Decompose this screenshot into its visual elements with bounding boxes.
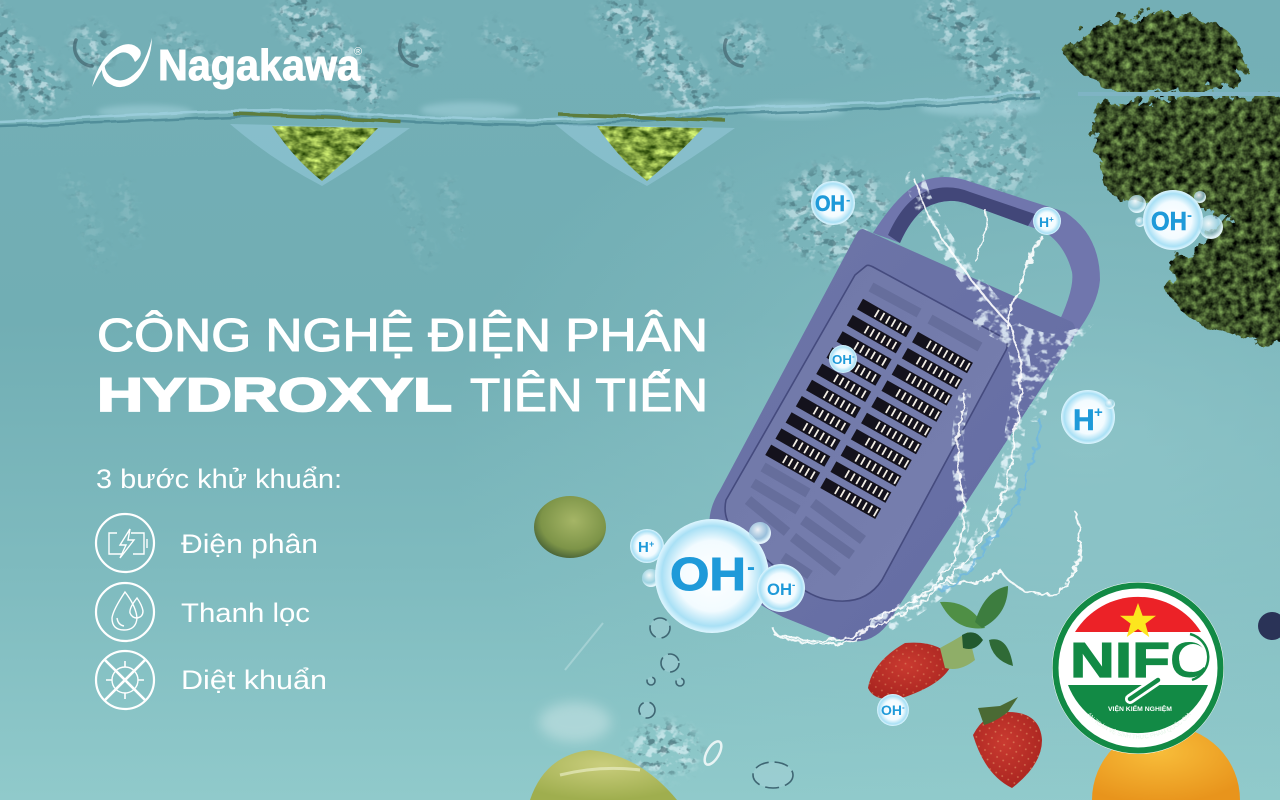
bubble: OH- top right: - xyxy=(1187,207,1192,224)
badge: NIFC xyxy=(1052,582,1224,754)
bubble: OH- on device xyxy=(829,345,857,373)
logo: Nagakawa: ® xyxy=(354,46,362,58)
green base xyxy=(1068,685,1208,733)
icon: water drops xyxy=(96,583,154,641)
device front panel xyxy=(725,265,1007,601)
bubble: OH- top centre: OH xyxy=(815,191,845,216)
NIF letters: NIF xyxy=(1070,634,1170,688)
strawberry leaves xyxy=(940,586,1013,669)
small H+ bubble xyxy=(630,529,664,563)
subheading: 3 bước khử khuẩn: xyxy=(96,464,342,494)
bubble: H+ right: + xyxy=(1094,404,1103,421)
electrode slots right column xyxy=(823,337,970,514)
headline: CÔNG NGHỆ ĐIỆN PHÂN xyxy=(97,309,708,361)
handle inner shadow xyxy=(888,187,1035,243)
badge: NIFC: AN TOÀN VỆ SINH THỰC PHẨM QUỐC GIA xyxy=(1087,713,1191,740)
bubble: OH- bottom: - xyxy=(902,703,905,712)
strawberry left xyxy=(868,586,1013,699)
logo: Nagakawa xyxy=(92,38,362,90)
bubble: OH- top centre: - xyxy=(846,192,850,207)
water surface line xyxy=(0,92,1040,126)
surface line across kale xyxy=(1078,92,1280,96)
step 1: electrolysis xyxy=(96,514,318,572)
label: Diệt khuẩn xyxy=(181,665,327,695)
device handle xyxy=(873,177,1100,335)
headline: HYDROXYL xyxy=(97,368,452,421)
bubble rings above the surface xyxy=(75,40,742,66)
small OH- bubble xyxy=(757,564,805,612)
icon: battery with lightning bolt xyxy=(96,514,154,572)
bubble: OH- on device: OH xyxy=(832,352,852,367)
submerged leaves under the surface xyxy=(230,124,735,186)
blue water strand xyxy=(940,420,1040,590)
institute name: VIỆN KIỂM NGHIỆM xyxy=(1108,704,1172,713)
bubble: OH- bottom xyxy=(877,694,909,726)
pear at bottom xyxy=(530,750,677,800)
logo swoosh icon xyxy=(92,38,152,87)
bubble cluster: large OH- xyxy=(630,519,805,633)
bubble cluster: large OH-: OH xyxy=(670,548,746,600)
bubble: H+ right xyxy=(1061,390,1115,444)
logo: Nagakawa: Nagakawa xyxy=(158,41,360,90)
bubble: H+ on handle: H xyxy=(1039,214,1049,230)
yellow star xyxy=(1120,603,1156,637)
bottom splash and bubbles xyxy=(539,618,793,788)
red cap xyxy=(1075,597,1201,632)
icon: crossed virus xyxy=(96,651,154,709)
device body xyxy=(709,229,1075,642)
small OH- bubble: OH xyxy=(767,580,792,599)
small H+ bubble: + xyxy=(649,539,654,549)
bubble: OH- top right: OH xyxy=(1151,206,1187,236)
C letter with magnifier lens: C xyxy=(1170,632,1206,688)
electrode slots left column xyxy=(768,304,909,478)
headline: TIÊN TIẾN xyxy=(470,369,708,421)
bubbly water texture xyxy=(870,171,1094,630)
C letter with magnifier lens xyxy=(1130,632,1208,699)
kale leaves top right xyxy=(1062,12,1280,345)
blueberry at right edge xyxy=(1258,612,1280,640)
bubble: H+ on handle: + xyxy=(1049,215,1054,224)
bubble: OH- bottom: OH xyxy=(881,702,902,718)
leaf one xyxy=(230,124,410,186)
top plate slots xyxy=(871,287,980,347)
step 2: purification xyxy=(96,583,310,641)
small H+ bubble: H xyxy=(638,539,649,556)
curved motto xyxy=(1085,712,1193,739)
white water strands xyxy=(772,180,1080,644)
surface splash highlights xyxy=(97,100,1040,119)
electrode plates xyxy=(784,313,970,514)
bubble: H+ on handle xyxy=(1033,207,1061,235)
strawberry right xyxy=(973,697,1042,788)
lower plate slots xyxy=(748,467,863,575)
bubble cluster: large OH-: - xyxy=(747,554,755,581)
orange xyxy=(1092,726,1240,800)
label: Thanh lọc xyxy=(181,598,310,628)
headline xyxy=(97,309,708,421)
leaf two xyxy=(555,124,735,186)
small OH- bubble: - xyxy=(792,580,795,591)
bubble: OH- top right xyxy=(1128,190,1223,250)
water splash over device xyxy=(772,171,1094,646)
label: Điện phân xyxy=(181,529,318,559)
bubble: OH- on device: - xyxy=(852,352,855,361)
bubble: OH- top centre xyxy=(811,181,855,225)
step 3: disinfection xyxy=(96,651,327,709)
product: electrolysis device xyxy=(709,177,1100,642)
bubble: H+ right: H xyxy=(1073,404,1095,437)
brussels sprout xyxy=(534,496,606,558)
